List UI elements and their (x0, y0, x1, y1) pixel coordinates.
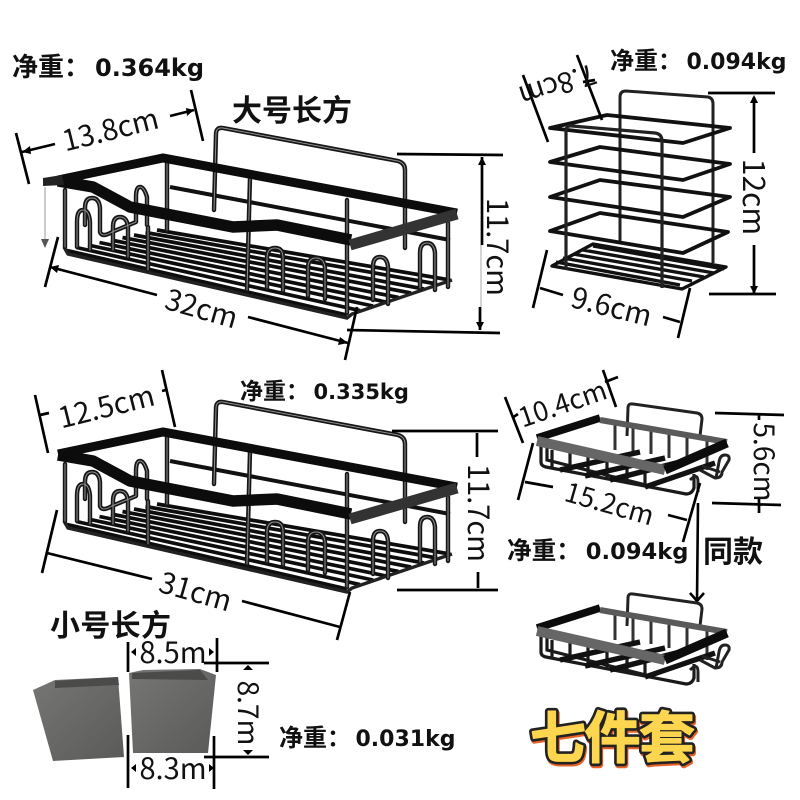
badge: seven-piece set: 七件套 (530, 707, 695, 770)
heading: large rectangular: 大号长方 (232, 95, 352, 128)
badge: seven-piece set: 七件套 (531, 709, 696, 772)
heading: small rectangular: 小号长方 (50, 610, 171, 643)
rack: large rectangular (41, 128, 457, 318)
dimensions: large rack: 11.7cm (478, 198, 520, 296)
dimensions: holder: 12cm (734, 159, 778, 235)
cups (33, 669, 216, 761)
dimensions: holder (514, 55, 778, 338)
rack: small rectangular (58, 402, 457, 592)
soap rack: top (537, 404, 729, 494)
dimensions: cups (128, 630, 269, 789)
dimensions: soap rack: 5.6cm (745, 422, 785, 502)
dimensions: large rack (16, 90, 520, 360)
dimensions: small rectangular rack: 12.5cm (53, 373, 159, 437)
dimensions: cups: 8.5m (139, 630, 207, 672)
label: same style: 同款 (703, 536, 763, 569)
weight label: medium rack: 净重：0.335kg (240, 379, 409, 405)
weight label: soap rack: 净重：0.094kg (507, 536, 688, 565)
dimensions: small rectangular rack: 31cm (155, 560, 237, 620)
dimensions: cups: 8.7m (229, 681, 269, 745)
dimensions: cups: 8.3m (139, 746, 207, 788)
dimensions: large rack: 32cm (161, 277, 243, 337)
dimensions: soap rack (505, 369, 785, 542)
dimensions: holder: 9.6cm (567, 275, 657, 335)
dimensions: large rack: 13.8cm (57, 96, 163, 160)
weight label: large rectangular rack: 净重：0.364kg (12, 53, 204, 83)
dimensions: soap rack: 10.4cm (513, 369, 611, 435)
weight label: holder: 净重：0.094kg (610, 47, 786, 75)
rack: upright holder (550, 91, 730, 289)
badge: seven-piece set: 七件套 (530, 707, 695, 770)
arrow: same style (690, 503, 704, 601)
dimensions: soap rack: 15.2cm (561, 471, 659, 533)
soap rack: bottom (537, 594, 729, 684)
dimensions: small rectangular rack: 11.7cm (459, 464, 501, 562)
dimensions: holder: 7.8cm (514, 55, 602, 117)
weight label: cups: 净重：0.031kg (279, 724, 455, 752)
dimensions: small rectangular rack (35, 370, 501, 640)
